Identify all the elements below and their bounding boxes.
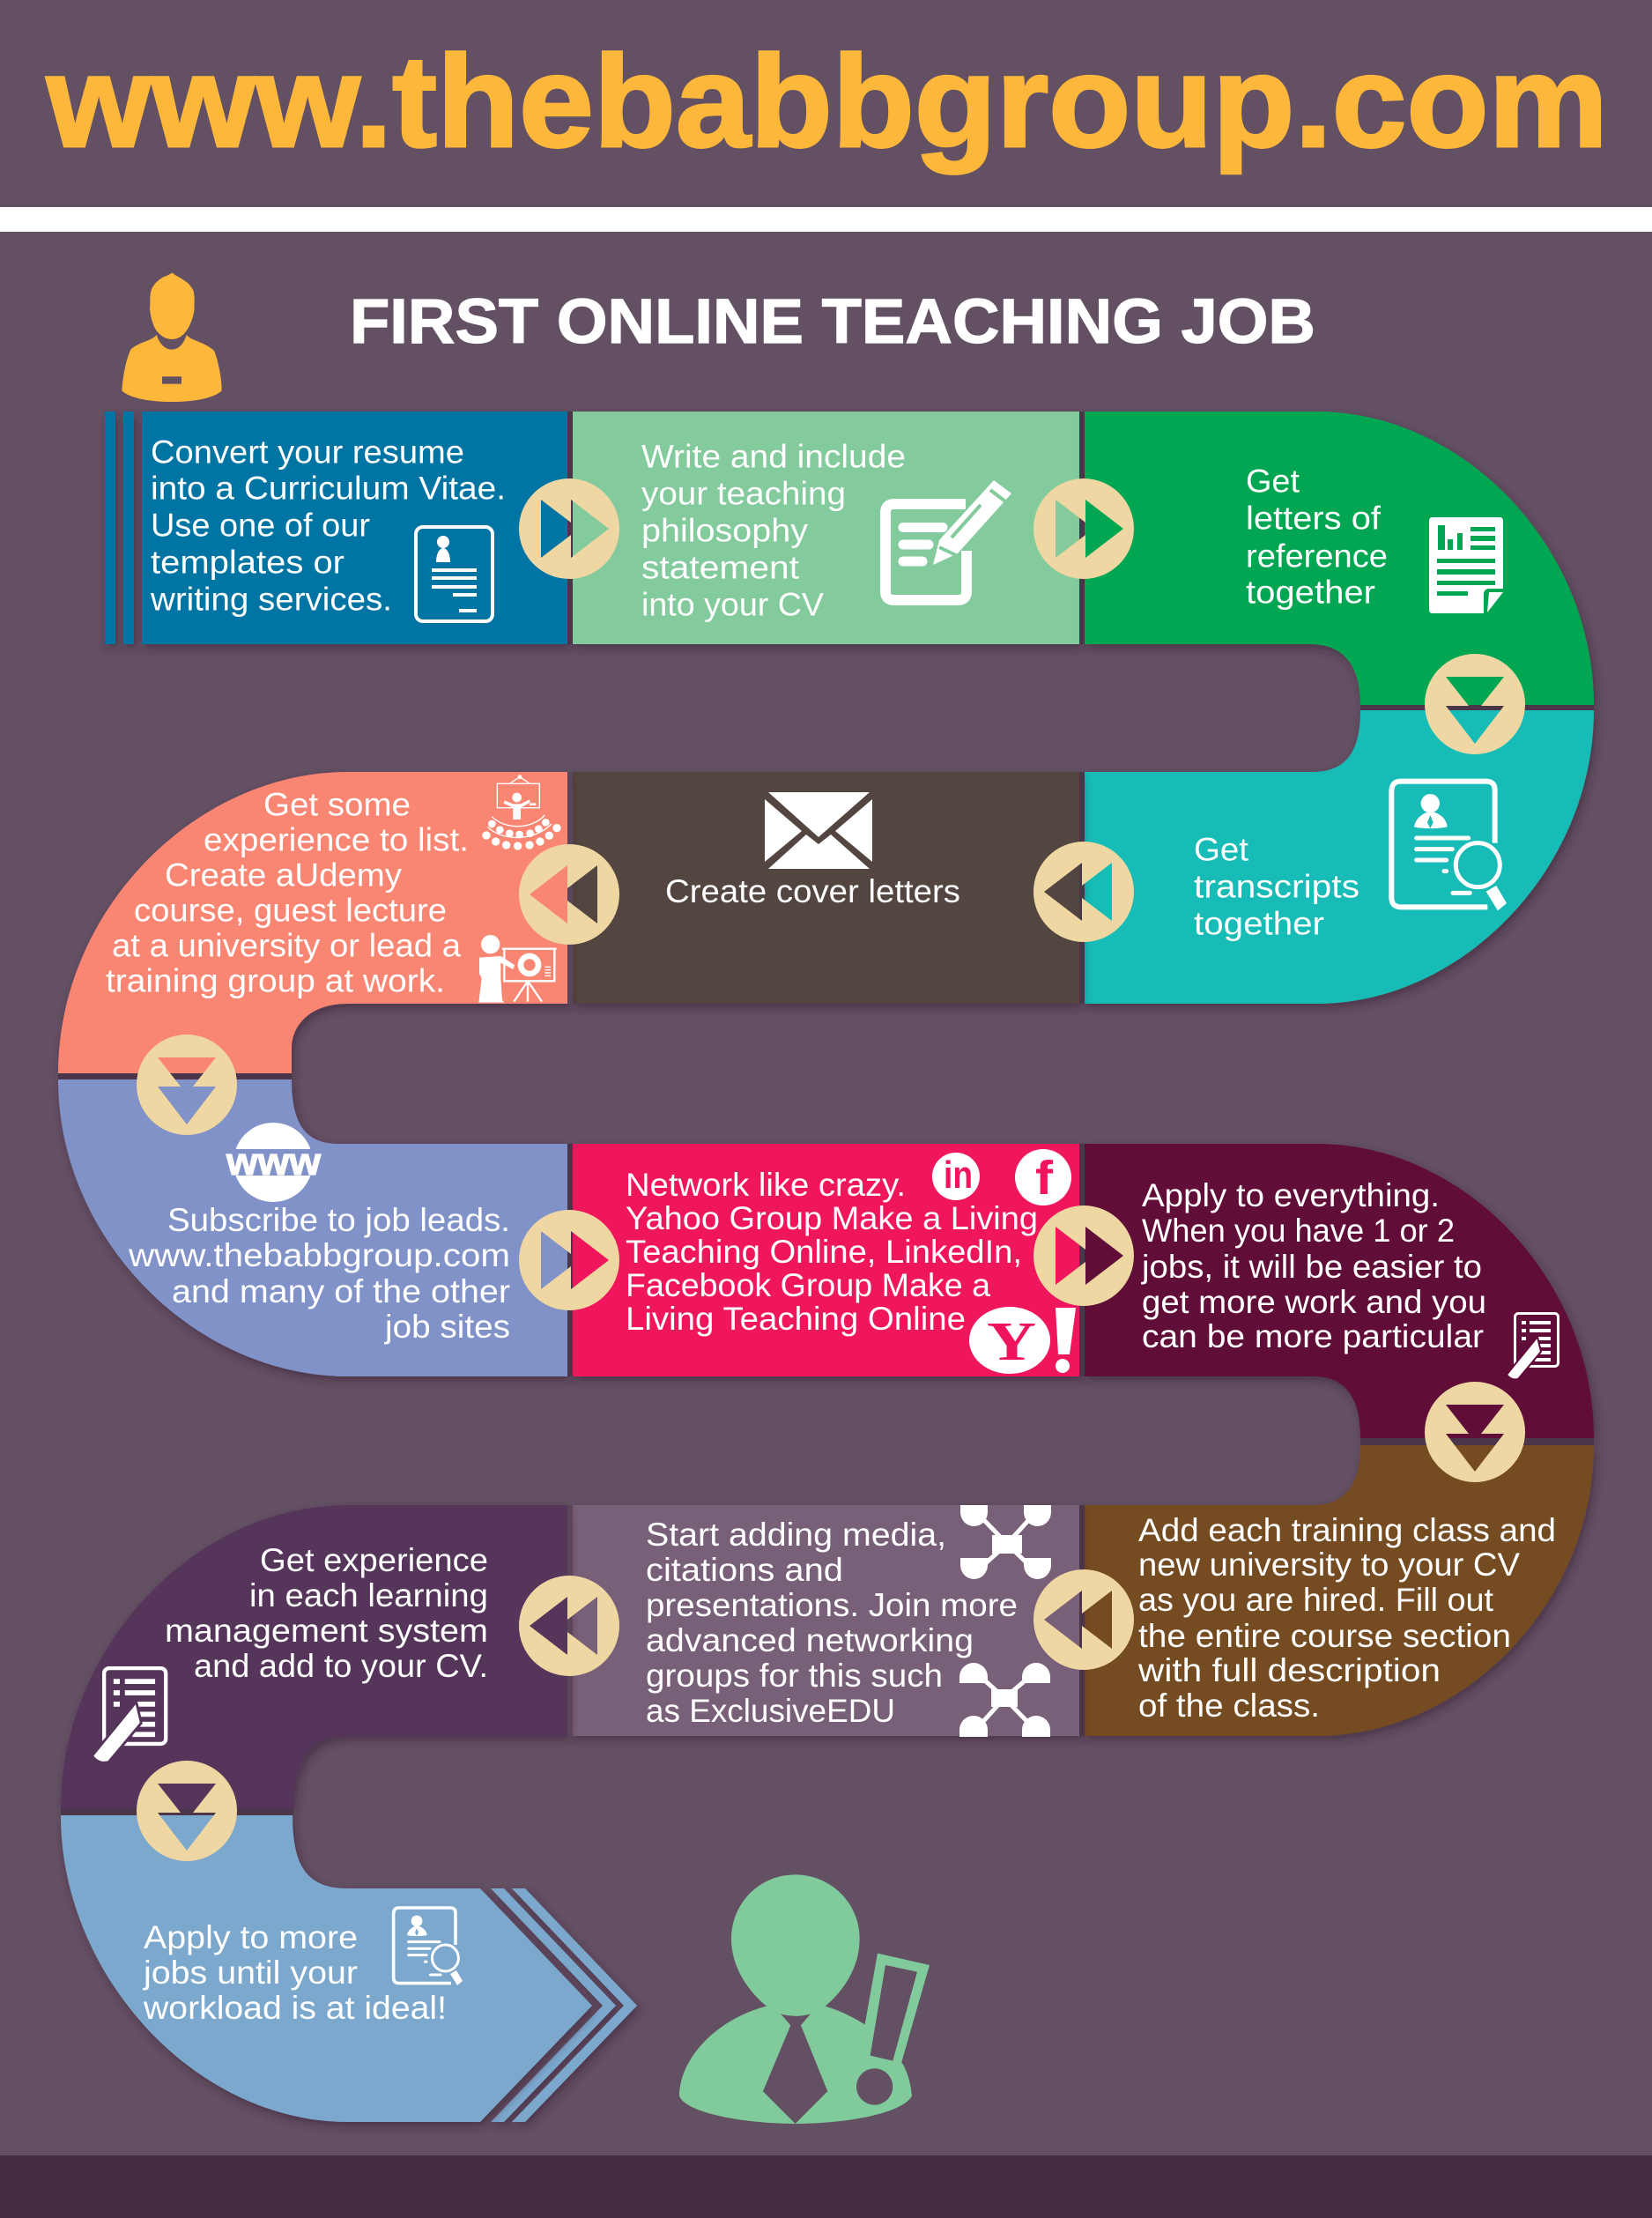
arrow: step 3 to 4	[1425, 654, 1525, 754]
heading: FIRST ONLINE TEACHING JOB	[350, 287, 1315, 357]
blue arrow panel	[61, 1815, 592, 2122]
step 11 text: presentations. Join more	[646, 1587, 1018, 1623]
arrow: step 5 to 6	[519, 844, 619, 945]
step 9 text: jobs, it will be easier to	[1141, 1249, 1482, 1285]
step 3 text: together	[1246, 575, 1375, 610]
icon: CV document	[416, 527, 493, 621]
pink panel	[573, 1144, 1079, 1376]
step 13 text	[143, 1919, 447, 2026]
step 2 text: philosophy	[641, 513, 809, 548]
icon: LinkedIn	[932, 1153, 980, 1200]
icon: Facebook	[1015, 1149, 1071, 1205]
icon: LinkedIn: in	[944, 1154, 973, 1197]
panel: step 1 convert resume	[105, 412, 567, 644]
panel: step 11 media and citations	[573, 1505, 1079, 1737]
panel: step 4 transcripts	[1085, 710, 1594, 1004]
step 3 text: reference	[1246, 538, 1388, 575]
step 6 text: course, guest lecture	[134, 892, 447, 929]
step 2 text: Write and include	[641, 439, 906, 474]
step 9 text: can be more particular	[1142, 1318, 1484, 1354]
step 11 text	[646, 1517, 1018, 1729]
step 13 text: workload is at ideal!	[143, 1990, 447, 2026]
arrow: step 6 to 7	[137, 1035, 237, 1135]
salmon curved panel	[58, 772, 567, 1073]
step 7 text	[128, 1202, 510, 1345]
white divider bar	[0, 207, 1652, 232]
step 8 text	[626, 1167, 1038, 1337]
step 6 text: at a university or lead a	[112, 927, 461, 964]
panel: step 5 cover letters	[573, 772, 1079, 1004]
step 12 text	[165, 1542, 488, 1684]
icon: Yahoo	[969, 1307, 1076, 1374]
dark brown panel	[573, 772, 1079, 1004]
step 2 text: into your CV	[641, 587, 824, 622]
step 7 text: job sites	[384, 1309, 510, 1345]
blue stripes and panel	[105, 412, 567, 644]
step 5 text: Create cover letters	[665, 873, 960, 909]
step 9 text	[1141, 1177, 1486, 1354]
step 10 text: new university to your CV	[1138, 1547, 1520, 1583]
step 6 text	[106, 786, 469, 999]
step 12 text: management system	[165, 1613, 488, 1649]
chevron stripes	[491, 1888, 637, 2122]
decorative	[567, 772, 573, 1736]
icon: document and pencil	[885, 480, 1011, 600]
step 10 text: with full description	[1137, 1652, 1441, 1688]
step 9 text: get more work and you	[1142, 1284, 1486, 1320]
step 3 text	[1246, 464, 1388, 610]
step 13 text: Apply to more	[144, 1919, 358, 1955]
step 1 text: templates or	[151, 545, 344, 580]
icon: Yahoo: Y	[987, 1312, 1036, 1372]
step 13 text: jobs until your	[143, 1955, 358, 1991]
panel: step 9 apply to everything	[1085, 1144, 1594, 1438]
step 1 text: writing services.	[150, 582, 392, 617]
step 3 text: letters of	[1246, 501, 1382, 536]
step 6 text: Create aUdemy	[165, 857, 403, 894]
step 7 text: and many of the other	[172, 1273, 510, 1309]
icon: lecture audience	[482, 775, 561, 850]
arrow: step 10 to 11	[1033, 1569, 1134, 1670]
arrow: step 7 to 8	[519, 1210, 619, 1310]
step 12 text: Get experience	[260, 1542, 488, 1578]
step 11 text: citations and	[646, 1552, 843, 1588]
step 12 text: in each learning	[249, 1577, 488, 1613]
step 8 text: Living Teaching Online	[626, 1301, 966, 1337]
step 8 text: Teaching Online, LinkedIn,	[626, 1234, 1022, 1270]
step 4 text: Get	[1194, 832, 1249, 867]
icon: checklist and pencil	[93, 1668, 166, 1762]
icon: report page	[1429, 517, 1503, 613]
light green panel	[573, 412, 1079, 644]
arrow: step 1 to 2	[519, 478, 619, 579]
step 1 text: into a Curriculum Vitae.	[151, 471, 506, 506]
step 11 text: advanced networking	[646, 1622, 974, 1658]
panel: step 13 final arrow	[61, 1815, 637, 2122]
icon: person with exclamation mark	[679, 1874, 930, 2124]
icon: CV and magnifier	[1391, 782, 1507, 910]
step 9 text: Apply to everything.	[1142, 1177, 1440, 1213]
panel: step 7 job leads	[58, 1079, 567, 1376]
arrow badges	[137, 478, 1525, 1861]
periwinkle curved panel	[58, 1079, 567, 1376]
arrow: step 12 to 13	[137, 1761, 237, 1861]
step 8 text: Network like crazy.	[626, 1167, 906, 1203]
step 12 text: and add to your CV.	[194, 1648, 488, 1684]
footer band	[0, 2155, 1652, 2218]
arrow: step 11 to 12	[519, 1576, 619, 1676]
arrow: step 4 to 5	[1033, 842, 1134, 942]
step 10 text	[1137, 1512, 1556, 1724]
icon: envelope	[765, 792, 872, 869]
step 2 text: your teaching	[641, 476, 846, 511]
panel: step 6 get experience	[58, 772, 567, 1073]
step 8 text: Yahoo Group Make a Living	[626, 1200, 1038, 1236]
step 7 text: www.thebabbgroup.com	[128, 1237, 510, 1273]
step 8 text: Facebook Group Make a	[626, 1267, 990, 1303]
step 6 text: training group at work.	[106, 962, 445, 999]
teal curved panel	[1085, 710, 1594, 1004]
step 10 text: the entire course section	[1138, 1618, 1511, 1654]
step 2 text	[641, 439, 906, 622]
purple curved panel	[61, 1505, 567, 1809]
arrow: step 9 to 10	[1425, 1382, 1525, 1482]
step 10 text: of the class.	[1138, 1688, 1320, 1724]
step 11 text: as ExclusiveEDU	[646, 1693, 895, 1729]
icon: network bottom	[959, 1663, 1050, 1737]
icon: www globe	[220, 1123, 326, 1202]
step 3 text: Get	[1246, 464, 1300, 499]
step 6 text: experience to list.	[204, 821, 469, 858]
icon: checklist and pencil	[1507, 1313, 1558, 1379]
arrow: step 8 to 9	[1033, 1205, 1134, 1306]
mauve panel	[573, 1505, 1079, 1736]
step 4 text: transcripts	[1194, 869, 1359, 904]
step 7 text: Subscribe to job leads.	[167, 1202, 510, 1238]
step 11 text: Start adding media,	[646, 1517, 946, 1553]
brown curved panel	[1085, 1445, 1594, 1736]
step 9 text: When you have 1 or 2	[1142, 1213, 1455, 1249]
step 1 text: Convert your resume	[151, 434, 464, 471]
icon: CV and magnifier	[394, 1908, 463, 1985]
header URL title: www.thebabbgroup.com	[46, 29, 1608, 174]
icon: teacher figure	[122, 272, 222, 402]
icon: network top	[960, 1505, 1051, 1579]
step 1 text	[150, 434, 506, 617]
arrow: step 2 to 3	[1033, 478, 1134, 579]
icon: presenter at board	[478, 935, 557, 1003]
panel: step 2 teaching philosophy	[573, 412, 1079, 644]
decorative	[58, 412, 1594, 1815]
step 2 text: statement	[641, 550, 800, 585]
step 6 text: Get some	[263, 786, 411, 823]
green curved panel	[1085, 412, 1594, 705]
panel: step 8 network	[573, 1144, 1079, 1376]
step 10 text: Add each training class and	[1138, 1512, 1556, 1548]
panel: step 12 learning management	[61, 1505, 567, 1809]
step 4 text	[1194, 832, 1359, 941]
step 1 text: Use one of our	[151, 508, 370, 543]
step 11 text: groups for this such	[646, 1658, 943, 1694]
step 10 text: as you are hired. Fill out	[1138, 1582, 1494, 1618]
icon: Facebook: f	[1035, 1152, 1054, 1205]
plum curved panel	[1085, 1144, 1594, 1438]
step 4 text: together	[1194, 906, 1324, 941]
panel: step 3 letters of reference	[1085, 412, 1594, 705]
icon: www globe: www	[226, 1140, 322, 1183]
panel: step 10 add to CV	[1085, 1445, 1594, 1736]
